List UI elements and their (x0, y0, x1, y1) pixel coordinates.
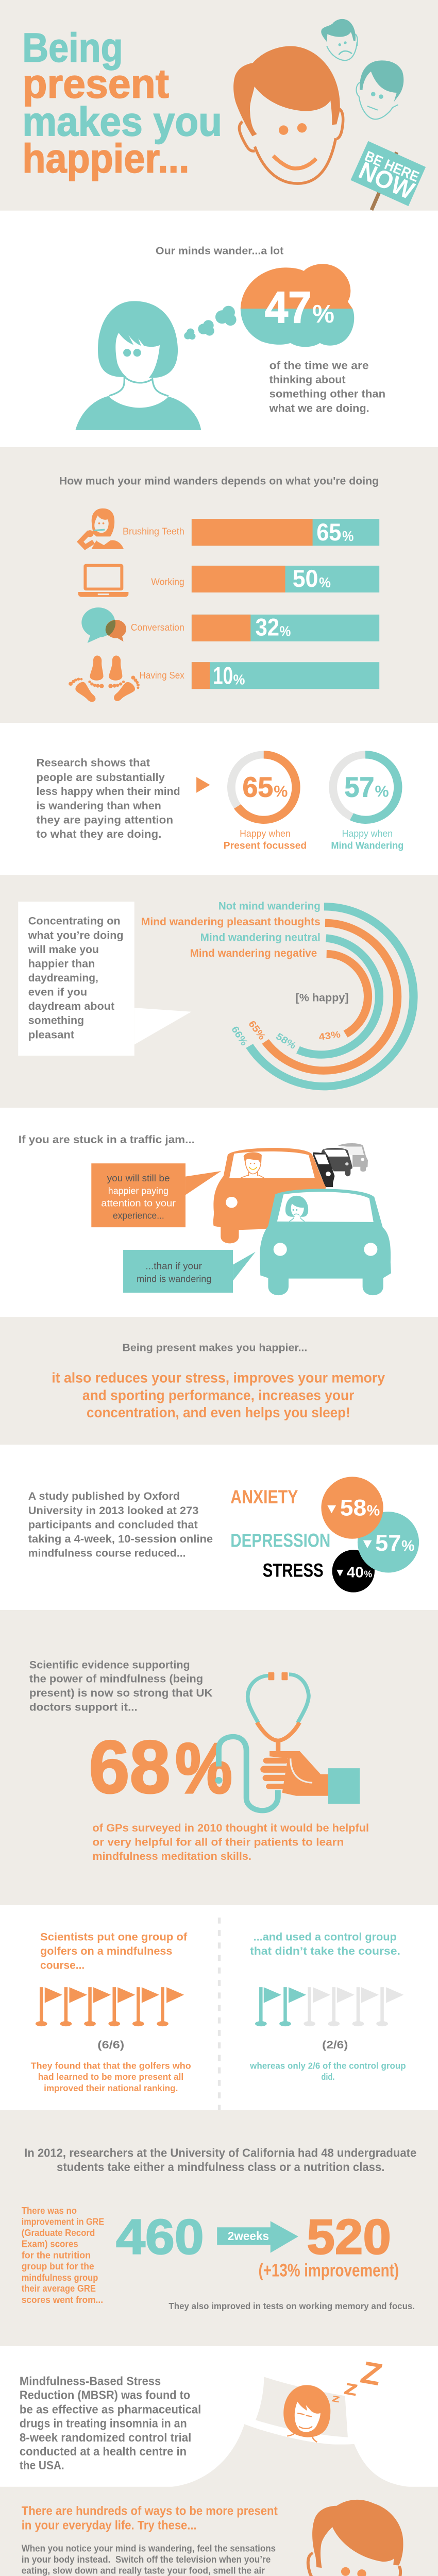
icon: teal car with unhappy driver (260, 1189, 391, 1295)
text block: be as effective as pharmaceutical (20, 2402, 201, 2416)
text block (22, 2206, 104, 2306)
bar: brushing teeth (192, 519, 379, 546)
bar: working: % (319, 575, 331, 591)
callout: present (91, 1163, 221, 1227)
text block: mindfulness course reduced... (28, 1547, 186, 1559)
text block: they are paying attention (36, 814, 173, 826)
icon: thought cloud with 47%: % (312, 300, 334, 328)
chart: radial happiness arcs: Mind wandering neutral (200, 931, 321, 943)
title: Being (22, 24, 123, 70)
label: Conversation (131, 622, 184, 633)
label: Having Sex (140, 670, 184, 681)
icon: black car (313, 1153, 334, 1187)
callout: daydreaming, (28, 972, 98, 984)
chart: reduction circles: % (401, 1538, 414, 1554)
icon: blanket (167, 2424, 413, 2487)
icon: feet (68, 655, 143, 706)
heading (24, 2147, 416, 2174)
chart: reduction circles: 40 (347, 1565, 364, 1581)
icon: thought cloud with 47%: 47 (265, 282, 311, 332)
icon: dark grey car (321, 1148, 352, 1176)
bar: having sex: 10 (213, 663, 233, 689)
text block: Reduction (MBSR) was found to (20, 2388, 190, 2402)
big number: % (175, 1729, 232, 1808)
text block: When you notice your mind is wandering, feel the sensations (22, 2543, 276, 2554)
chart: radial happiness arcs: 66% (229, 1025, 250, 1047)
label: Working (151, 577, 184, 588)
text block: concentration, and even helps you sleep! (87, 1405, 350, 1421)
text block: their average GRE (22, 2283, 96, 2294)
heading (22, 2504, 278, 2532)
bar: brushing teeth: % (342, 529, 353, 545)
text block (31, 2061, 191, 2093)
chart: happy when mind wandering: Mind Wandering (331, 840, 403, 851)
text block (40, 1930, 188, 1971)
bar: conversation (192, 614, 379, 641)
text block: mindfulness meditation skills. (92, 1850, 251, 1862)
text block (28, 1490, 213, 1559)
chart: happy when present focussed: % (274, 782, 288, 800)
chart: radial happiness arcs (141, 900, 413, 1087)
callout: pleasant (28, 1028, 75, 1041)
chart: reduction circles: % (364, 1569, 372, 1580)
icon: brushing teeth (80, 509, 124, 549)
icon: neutral teal face (357, 60, 403, 119)
text block: of the time we are (269, 359, 369, 372)
bar: having sex: % (233, 672, 245, 688)
icon: thought cloud with 47% (241, 264, 354, 347)
text block: conducted at a health centre in (20, 2445, 187, 2458)
text block: the power of mindfulness (being (29, 1672, 203, 1685)
text block (29, 1658, 213, 1713)
chart: reduction circles (321, 1477, 419, 1592)
panel: golfers (31, 1918, 406, 2110)
text block: Research shows that (36, 756, 150, 769)
icon: sleeping woman: z (342, 2375, 361, 2400)
label: DEPRESSION (230, 1531, 330, 1551)
heading: Our minds wander...a lot (156, 245, 283, 257)
chart: radial happiness arcs: 43% (318, 1029, 341, 1043)
text block: scores went from... (22, 2295, 103, 2306)
text block: the USA. (20, 2459, 64, 2472)
text block: taking a 4-week, 10-session online (28, 1532, 213, 1545)
text block: in your body instead. Switch off the television when you’re (22, 2554, 271, 2565)
callout: what you’re doing (28, 929, 124, 941)
text block: that didn’t take the course. (250, 1944, 400, 1957)
label: (2/6) (322, 2039, 348, 2051)
text block: did. (321, 2072, 334, 2082)
text block (92, 1822, 369, 1862)
chart: happy when mind wandering: Happy when (342, 828, 393, 839)
big number: 520: 520 (307, 2209, 391, 2264)
bar: working (192, 565, 379, 592)
icon: sleeping woman: z (330, 2392, 342, 2405)
panel: GRE study (0, 2110, 438, 2346)
heading: Being present makes you happier... (122, 1342, 307, 1353)
text block: drugs in treating insomnia in an (20, 2417, 187, 2430)
icon: speech bubbles (81, 607, 126, 643)
chart: reduction circles: 58 (340, 1495, 366, 1520)
text block: Mindfulness-Based Stress (20, 2374, 161, 2388)
text block: less happy when their mind (36, 785, 180, 798)
text block: people are substantially (36, 771, 165, 784)
text block: improved their national ranking. (44, 2083, 178, 2093)
text block: and sporting performance, increases your (82, 1387, 354, 1403)
callout: wandering: mind is wandering (137, 1274, 211, 1284)
panel: other benefits (0, 1317, 438, 1445)
icon: be here now sign (350, 141, 426, 210)
title: makes you (22, 98, 222, 144)
chart: happy when mind wandering (331, 755, 403, 851)
callout: present: happier paying (108, 1186, 169, 1196)
panel: try these (0, 2487, 438, 2576)
title (22, 24, 222, 181)
label: STRESS (263, 1561, 324, 1581)
text block: whereas only 2/6 of the control group (249, 2061, 406, 2071)
heading: If you are stuck in a traffic jam... (19, 1133, 195, 1146)
chart: happy when present focussed: 65 (243, 772, 273, 803)
text block: something other than (269, 387, 385, 400)
title: happier... (22, 135, 190, 181)
callout: present: attention to your (101, 1198, 176, 1209)
chart: radial happiness arcs: [% happy] (296, 991, 349, 1004)
text block (250, 1930, 400, 1957)
text block (249, 2061, 406, 2082)
icon: sleeping woman (256, 2355, 385, 2442)
chart: happy when present focussed: Happy when (240, 828, 291, 839)
icon: stethoscope in hand (215, 1672, 360, 1810)
callout: present: you will still be (107, 1173, 170, 1184)
icon: small thought bubbles (184, 306, 237, 340)
text block (269, 359, 385, 415)
chart: radial happiness arcs: Not mind wandering (218, 900, 321, 912)
text block: of GPs surveyed in 2010 thought it would be helpful (92, 1822, 369, 1834)
chart: happy when present focussed: Present focussed (224, 840, 307, 851)
text block: Scientific evidence supporting (29, 1658, 190, 1671)
text block: improvement in GRE (22, 2217, 104, 2227)
text block: group but for the (22, 2261, 94, 2272)
text block: Scientists put one group of (40, 1930, 188, 1943)
icon: light grey car (338, 1143, 368, 1172)
text block: ...and used a control group (254, 1930, 397, 1943)
big number: 460: 460 (116, 2209, 204, 2264)
panel: minds wander (75, 245, 385, 430)
bar: brushing teeth: 65 (316, 519, 341, 546)
icon: happy orange face (233, 46, 343, 183)
callout: Concentrating on (28, 914, 121, 927)
panel: percent happy (0, 875, 438, 1108)
text block: doctors support it... (29, 1701, 138, 1713)
callout: will make you (28, 943, 99, 956)
text block: A study published by Oxford (28, 1490, 180, 1502)
text block: mindfulness group (22, 2273, 98, 2283)
icon: sad teal face (321, 19, 358, 60)
text block (52, 1370, 385, 1421)
callout: even if you (28, 986, 87, 998)
text block: what we are doing. (269, 402, 369, 415)
bar: conversation: 32 (255, 614, 279, 641)
text block: is wandering than when (36, 800, 161, 812)
title: present (22, 61, 169, 107)
chart: radial happiness arcs: 58% (274, 1031, 298, 1052)
chart: happy when mind wandering: 57 (344, 772, 374, 803)
callout: wandering: ...than if your (145, 1261, 202, 1272)
panel: oxford study (28, 1477, 419, 1592)
text block: course... (40, 1959, 85, 1971)
text block (22, 2543, 276, 2576)
icon: laptop (78, 565, 128, 597)
icon: woman thinking (75, 301, 201, 430)
callout: wandering (123, 1250, 256, 1293)
text block (36, 756, 180, 840)
bar: working: 50 (293, 565, 318, 592)
text block: had learned to be more present all (38, 2072, 183, 2082)
callout: daydream about (28, 1000, 115, 1012)
big number: 68 (89, 1725, 171, 1809)
callout (18, 902, 191, 1056)
text block: to what they are doing. (36, 828, 161, 840)
text block: thinking about (269, 373, 346, 386)
panel: research (36, 755, 403, 851)
text block: They found that that the golfers who (31, 2061, 191, 2071)
heading: There are hundreds of ways to be more present (22, 2504, 278, 2518)
panel: mind wandering by activity (0, 447, 438, 723)
chart: radial happiness arcs: 65% (246, 1019, 267, 1042)
text block: present) is now so strong that UK (29, 1686, 213, 1699)
big number (89, 1725, 232, 1809)
icon: be here now sign: BE HERE (362, 147, 422, 185)
heading: How much your mind wanders depends on what you're doing (59, 474, 379, 487)
text block: golfers on a mindfulness (40, 1944, 172, 1957)
label: Brushing Teeth (123, 527, 184, 537)
text block: or very helpful for all of their patients to learn (92, 1836, 344, 1848)
icon: sleeping woman: Z (357, 2355, 385, 2392)
chart: reduction circles: 57 (375, 1530, 401, 1556)
chart: happy when present focussed (224, 755, 307, 851)
text block: 8-week randomized control trial (20, 2431, 191, 2444)
text block: Exam) scores (22, 2239, 78, 2249)
text block: University in 2013 looked at 273 (28, 1504, 198, 1517)
text block (20, 2374, 201, 2472)
panel: header (0, 0, 438, 211)
callout: happier than (28, 957, 95, 970)
text block: it also reduces your stress, improves your memory (52, 1370, 385, 1386)
label: ANXIETY (230, 1487, 298, 1508)
text block: (Graduate Record (22, 2228, 95, 2239)
callout: present: experience... (113, 1211, 164, 1221)
heading: in your everyday life. Try these... (22, 2518, 197, 2532)
text block: eating, slow down and really taste your food, smell the air (22, 2565, 265, 2576)
arrow (196, 777, 210, 793)
chart: radial happiness arcs: Mind wandering pleasant thoughts (141, 916, 321, 928)
icon: smiling face (308, 2500, 403, 2576)
text block: for the nutrition (22, 2250, 91, 2261)
text block: There was no (22, 2206, 77, 2216)
icon: orange car with happy driver (213, 1148, 326, 1243)
panel: traffic jam (19, 1133, 391, 1295)
icon: be here now sign: NOW (355, 157, 418, 205)
chart: happy when mind wandering: % (375, 782, 389, 800)
bar: having sex (192, 662, 379, 689)
chart: reduction circles: % (367, 1502, 380, 1519)
chart: radial happiness arcs: Mind wandering negative (190, 947, 317, 959)
icon: teal and grey golf flags (255, 1987, 403, 2026)
panel: MBSR insomnia (20, 2355, 413, 2487)
label: (6/6) (97, 2039, 124, 2051)
icon: orange golf flags (36, 1987, 184, 2026)
text block: participants and concluded that (28, 1518, 198, 1531)
arrow: 2 weeks: 2weeks (228, 2230, 269, 2243)
callout: something (28, 1014, 84, 1027)
arrow: 2 weeks (217, 2221, 298, 2253)
panel: UK doctors (0, 1610, 438, 1905)
bar: conversation: % (280, 623, 291, 639)
